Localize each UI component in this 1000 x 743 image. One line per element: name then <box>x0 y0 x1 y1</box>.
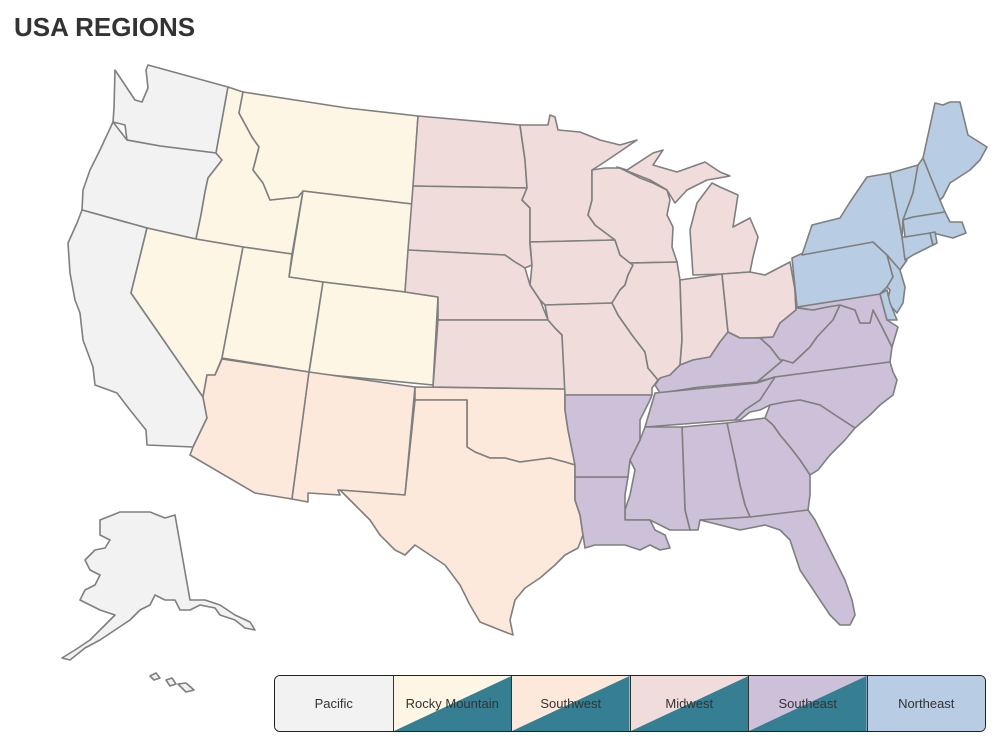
legend: midwest: Midwest <box>665 696 713 711</box>
title: USA REGIONS <box>14 12 195 42</box>
legend: northeast <box>868 676 985 731</box>
region: rocky mountain <box>131 87 438 397</box>
legend: southeast: Southeast <box>778 696 837 711</box>
region: southwest <box>190 359 583 635</box>
legend: rocky mountain: Rocky Mountain <box>406 696 499 711</box>
legend: southwest <box>512 676 630 731</box>
legend <box>274 675 986 732</box>
region: pacific <box>62 65 255 692</box>
legend: pacific <box>275 676 394 731</box>
region: northeast <box>792 102 987 320</box>
legend: southeast <box>749 676 868 731</box>
legend: midwest <box>630 676 749 731</box>
region: southeast <box>565 290 898 625</box>
legend: northeast: Northeast <box>898 696 954 711</box>
legend: southwest: Southwest <box>540 696 601 711</box>
region: midwest <box>405 115 796 395</box>
legend: pacific: Pacific <box>315 696 353 711</box>
legend: rocky mountain <box>394 676 512 731</box>
